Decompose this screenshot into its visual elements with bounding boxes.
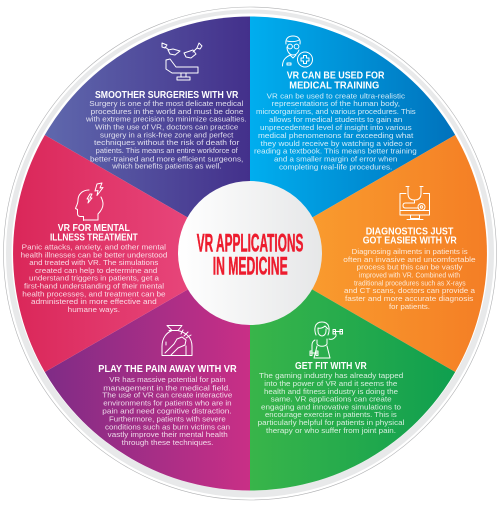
heading: mental illness: VR FOR MENTAL <box>58 223 130 234</box>
text: medical training body: allows for medical students to gain an <box>269 115 402 124</box>
panel: pain <box>98 326 237 447</box>
text: pain body: management in the medical field. <box>103 383 231 392</box>
text: mental illness body: understand triggers in patients, get a <box>29 274 160 283</box>
text: mental illness body: created can help to determine and <box>35 266 157 275</box>
text: medical training body: reading a textbook. This means better training <box>254 147 417 156</box>
heading: mental illness <box>50 223 138 244</box>
panel: medical training <box>254 36 417 171</box>
text: diagnostics body: traditional procedures such as X-rays <box>354 278 466 287</box>
text: pain body <box>102 375 232 447</box>
text: medical training body: representations of the human body, <box>272 99 400 108</box>
text: diagnostics body: Diagnosing ailments in patients is <box>352 247 468 256</box>
wedge: get fit <box>250 254 455 490</box>
wedge: medical training <box>250 16 455 254</box>
text: pain body: through these techniques. <box>122 438 213 447</box>
text: get fit body: particularly helpful for patients in physical <box>258 418 405 427</box>
text: smoother surgeries body: Surgery is one of the most delicate medical <box>89 99 244 108</box>
heading: diagnostics: GOT EASIER WITH VR <box>363 236 457 247</box>
text: smoother surgeries body: with extreme precision to minimize casualties. <box>85 115 247 124</box>
text: get fit body <box>258 371 405 435</box>
text: pain body: conditions such as burn victims can <box>105 422 230 431</box>
text: pain body: pain and need cognitive distraction. <box>102 406 232 415</box>
text: mental illness body: and treated with VR. The simulations <box>29 258 159 267</box>
wedge: mental illness <box>13 135 250 372</box>
wedge: pain <box>45 254 250 490</box>
text: diagnostics body <box>343 247 476 311</box>
panel: smoother surgeries <box>85 43 247 171</box>
text: get fit body: encourage exercise in patients. This is <box>265 410 397 419</box>
text: get fit body: engaging and innovative simulations to <box>261 402 401 411</box>
text: smoother surgeries body: procedures in the world and must be done <box>91 107 243 116</box>
text: smoother surgeries body: techniques without the risk of death for <box>94 138 240 147</box>
title <box>197 230 303 280</box>
text: get fit body: therapy or who suffer from joint pain. <box>266 426 396 435</box>
text: smoother surgeries body: which benefits patients as well. <box>111 162 222 171</box>
heading: medical training: MEDICAL TRAINING <box>289 80 379 91</box>
icon: hand on painful shoulder <box>162 326 192 356</box>
text: mental illness body <box>21 242 167 314</box>
text: medical training body: completing real-life procedures. <box>279 162 392 171</box>
text: smoother surgeries body: better-trained and more efficient surgeons, <box>90 154 243 163</box>
icon: monitor with stethoscope <box>400 186 430 220</box>
text: mental illness body: health processes, and treatment can be <box>22 289 166 298</box>
text: pain body: vastly improve their mental health <box>108 430 228 439</box>
text: mental illness body: health illnesses can be better understood <box>21 250 167 259</box>
text: mental illness body: first-hand understanding of their mental <box>24 282 164 291</box>
text: smoother surgeries body: surgery in a risk-free zone and perfect <box>100 130 233 139</box>
text: VR APPLICATIONS <box>197 230 303 258</box>
text: diagnostics body: often an invasive and uncomfortable <box>343 255 476 264</box>
wedge: smoother surgeries <box>45 16 250 254</box>
text: mental illness body: humane ways. <box>68 305 120 314</box>
text: smoother surgeries body <box>85 99 247 171</box>
heading: medical training <box>287 71 385 91</box>
text: diagnostics body: and CT scans, doctors can provide a <box>344 286 476 295</box>
text: smoother surgeries body: With the use of VR, doctors can practice <box>95 123 238 132</box>
text: pain body: Furthermore, patients with severe <box>109 415 226 424</box>
icon: surgical table and lamps <box>162 43 202 80</box>
text: mental illness body: administered in more effective and <box>31 297 157 306</box>
icon: head with lightning bolts <box>76 183 103 220</box>
icon: doctor with medical cross <box>282 36 312 67</box>
text: pain body: The use of VR can create interactive <box>102 391 232 400</box>
text: medical training body: medical phenomenons far exceeding what <box>258 131 413 140</box>
text: medical training body: VR can be used to create ultra-realistic <box>267 92 405 101</box>
text: get fit body: same. VR applications can create <box>271 395 392 404</box>
heading: medical training: VR CAN BE USED FOR <box>287 71 385 82</box>
text: get fit body: The gaming industry has already tapped <box>259 371 403 380</box>
text: medical training body: they would receive by watching a video or <box>261 139 413 148</box>
text: get fit body: health and fitness industry is doing the <box>264 387 398 396</box>
text: smoother surgeries body: patients. This means an entire workforce of <box>96 146 239 155</box>
text: medical training body: microorganisms, and various procedures. This <box>256 107 416 116</box>
panel: get fit <box>258 322 405 435</box>
text: diagnostics body: process but this can be vastly <box>357 263 463 272</box>
icon: woman with dumbbells <box>310 322 342 358</box>
panel: mental illness <box>21 183 167 314</box>
heading: get fit: GET FIT WITH VR <box>295 361 367 372</box>
text: diagnostics body: improved with VR. Combined with <box>359 271 460 280</box>
panel: diagnostics <box>343 186 476 311</box>
heading: smoother surgeries: SMOOTHER SURGERIES WITH VR <box>95 90 239 101</box>
heading: diagnostics <box>363 226 457 247</box>
text: diagnostics body: faster and more accurate diagnosis <box>345 294 474 303</box>
title: IN MEDICINE <box>213 252 288 280</box>
text: pain body: environments for patients who are in <box>103 398 232 407</box>
text: diagnostics body: for patients. <box>389 302 430 311</box>
heading: pain: PLAY THE PAIN AWAY WITH VR <box>98 364 237 375</box>
wedge: diagnostics <box>250 135 487 372</box>
heading: mental illness: ILLNESS TREATMENT <box>50 233 138 244</box>
text: get fit body: into the power of VR and it seems the <box>264 379 397 388</box>
text: pain body: VR has massive potential for pain <box>109 375 226 384</box>
text: medical training body: unprecedented level of insight into various <box>260 123 412 132</box>
heading: diagnostics: DIAGNOSTICS JUST <box>366 226 454 237</box>
text: mental illness body: Panic attacks, anxiety, and other mental <box>22 242 166 251</box>
text: medical training body <box>254 92 417 171</box>
center circle <box>178 181 322 325</box>
text: medical training body: and a smaller margin of error when <box>274 154 397 163</box>
